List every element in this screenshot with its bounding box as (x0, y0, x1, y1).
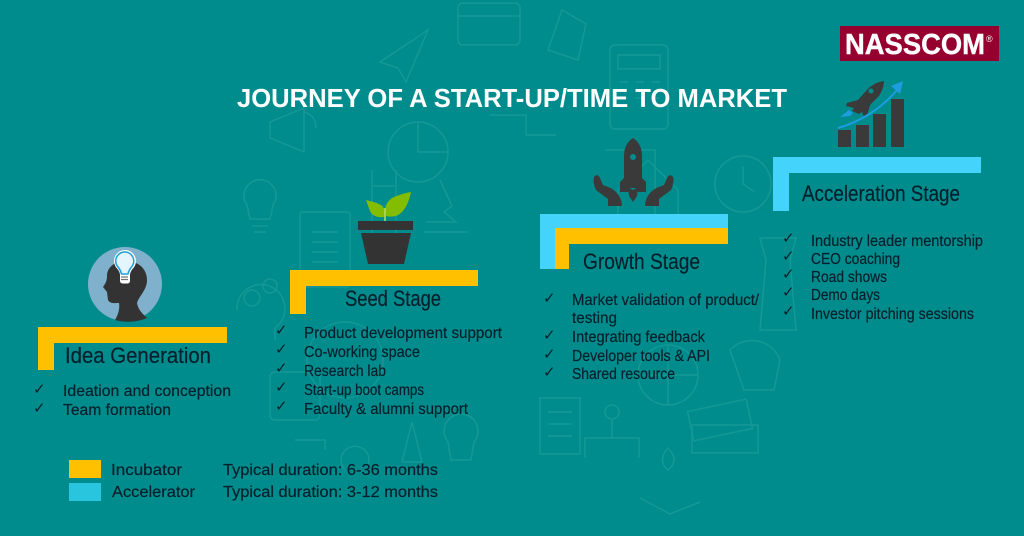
icon: rocket and bar chart (838, 81, 904, 147)
checklist: seed stage: Product development support (304, 325, 503, 342)
checklist: acceleration stage: Demo days (811, 287, 880, 304)
legend: Incubator (111, 462, 182, 479)
logo: NASSCOM: NASSCOM (845, 29, 985, 61)
checklist: seed stage: Co-working space (304, 344, 420, 361)
checklist: growth stage: ✓ (543, 327, 556, 344)
checklist: acceleration stage: ✓ (782, 266, 795, 283)
checklist: idea generation: ✓ (33, 400, 46, 417)
checklist: acceleration stage: ✓ (782, 230, 795, 247)
checklist: acceleration stage (782, 230, 983, 323)
checklist: growth stage: testing (572, 310, 617, 327)
heading: acceleration stage: Acceleration Stage (802, 181, 960, 206)
bracket: incubator (555, 228, 728, 269)
checklist: growth stage: Integrating feedback (572, 329, 705, 346)
checklist: seed stage: Research lab (304, 363, 386, 380)
checklist: idea generation: ✓ (33, 381, 46, 398)
legend: Typical duration: 3-12 months (223, 484, 438, 501)
bracket: incubator (38, 327, 227, 370)
heading: growth stage: Growth Stage (583, 249, 700, 274)
legend (69, 460, 438, 501)
bracket: incubator (290, 270, 478, 314)
checklist: acceleration stage: Industry leader mentorship (811, 233, 983, 250)
panel: acceleration stage (773, 81, 983, 323)
checklist: growth stage (543, 290, 760, 383)
checklist: growth stage: Shared resource (572, 366, 675, 383)
panel: growth stage (540, 138, 760, 383)
icon: seedling in pot (358, 192, 413, 264)
checklist: idea generation: Team formation (63, 402, 171, 419)
legend: Accelerator (112, 484, 195, 501)
heading: idea generation: Idea Generation (65, 343, 211, 368)
checklist: growth stage: ✓ (543, 346, 556, 363)
icon: head with light bulb (88, 247, 162, 322)
checklist: seed stage: ✓ (275, 360, 288, 377)
checklist: acceleration stage: Road shows (811, 269, 887, 286)
checklist: growth stage: ✓ (543, 290, 556, 307)
checklist: seed stage: ✓ (275, 322, 288, 339)
checklist: seed stage: Start-up boot camps (304, 382, 424, 399)
bracket: accelerator (773, 157, 981, 211)
title: JOURNEY OF A START-UP/TIME TO MARKET (237, 83, 787, 113)
panel: seed stage (275, 192, 503, 418)
checklist: acceleration stage: Investor pitching sessions (811, 306, 974, 323)
checklist: growth stage: Developer tools & API (572, 348, 710, 365)
checklist: idea generation (33, 381, 231, 419)
checklist: seed stage: Faculty & alumni support (304, 401, 469, 418)
checklist: acceleration stage: CEO coaching (811, 251, 900, 268)
bracket: accelerator (540, 214, 728, 269)
checklist: acceleration stage: ✓ (782, 303, 795, 320)
checklist: seed stage: ✓ (275, 379, 288, 396)
checklist: growth stage: Market validation of product/ (572, 292, 760, 309)
panel: idea generation (33, 247, 231, 419)
checklist: seed stage: ✓ (275, 341, 288, 358)
heading: seed stage: Seed Stage (345, 286, 441, 311)
checklist: seed stage (275, 322, 503, 418)
logo: NASSCOM: ® (986, 34, 993, 44)
checklist: idea generation: Ideation and conception (63, 383, 231, 400)
checklist: acceleration stage: ✓ (782, 248, 795, 265)
checklist: seed stage: ✓ (275, 398, 288, 415)
legend: Typical duration: 6-36 months (223, 462, 438, 479)
icon: rocket in hands (594, 138, 673, 206)
checklist: acceleration stage: ✓ (782, 284, 795, 301)
checklist: growth stage: ✓ (543, 364, 556, 381)
